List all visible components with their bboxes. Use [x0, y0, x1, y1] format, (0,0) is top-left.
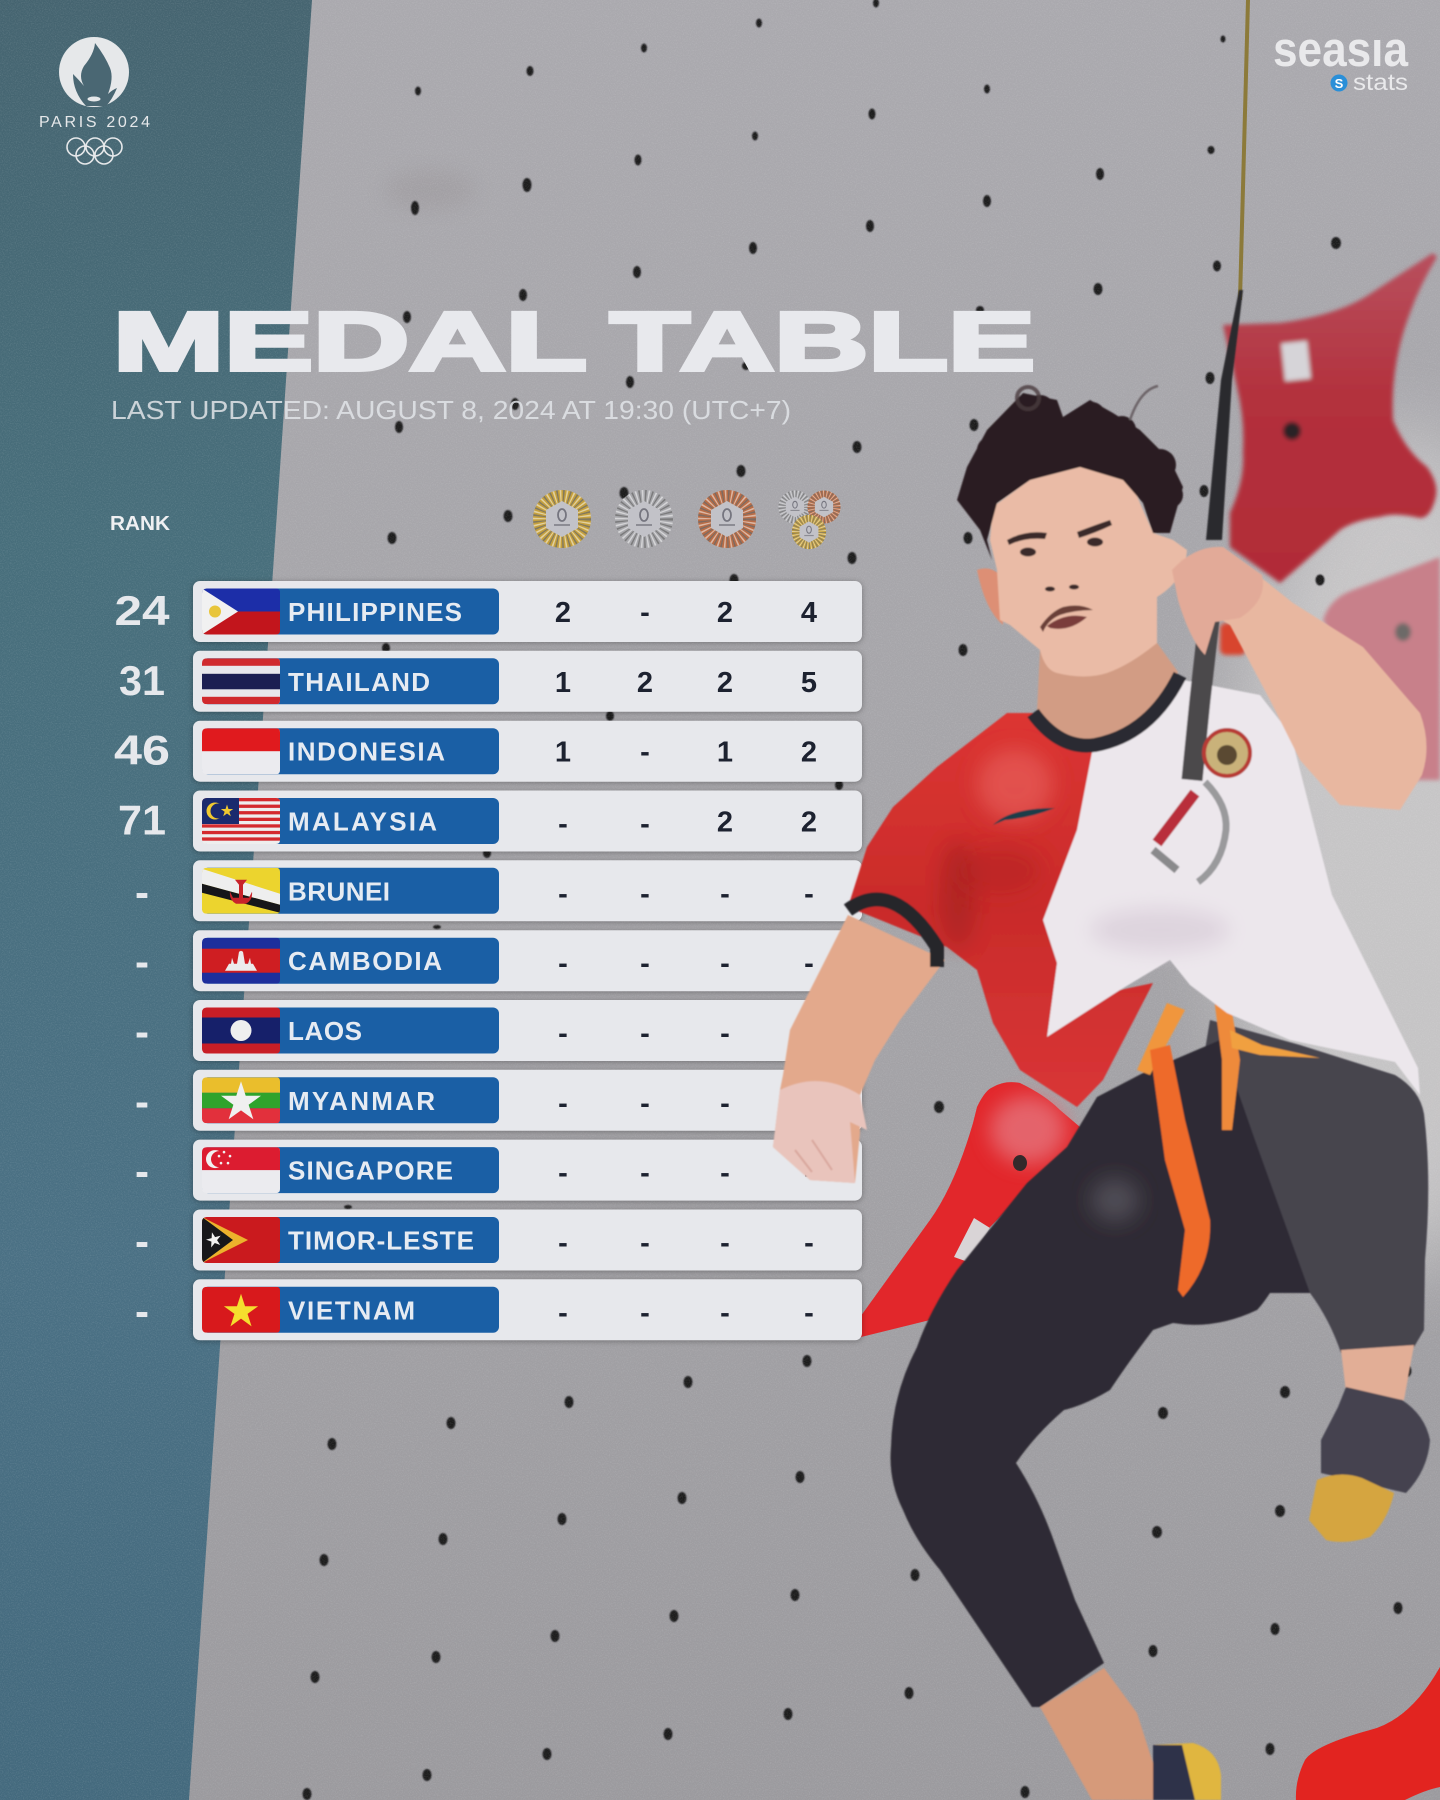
country name: BRUNEI — [288, 876, 390, 906]
table row: Philippines — [114, 581, 862, 642]
medal counts: 2 — [717, 597, 733, 629]
rank: - — [135, 1078, 149, 1125]
blue name bar — [202, 728, 499, 774]
row panel — [193, 1000, 862, 1061]
medal header: gold — [533, 490, 591, 548]
hair curl — [1017, 387, 1039, 409]
blue name bar — [202, 1287, 499, 1333]
table row: Laos — [135, 1000, 862, 1061]
medal counts — [555, 737, 817, 769]
medal counts: - — [640, 1018, 650, 1050]
rope: black section — [1206, 290, 1243, 540]
flag: Singapore — [202, 1147, 280, 1193]
flag: Malaysia — [202, 798, 280, 844]
back leg — [1180, 1020, 1428, 1356]
medal counts: 1 — [555, 667, 571, 699]
medal counts: - — [720, 1297, 730, 1329]
medal counts: 2 — [555, 597, 571, 629]
medal counts — [558, 948, 814, 980]
column header: rank: RANK — [110, 513, 171, 535]
collar — [1033, 675, 1180, 746]
climbing shoe: raised foot — [1309, 1387, 1430, 1542]
row panel — [193, 1279, 862, 1340]
sleeve logo — [993, 808, 1055, 825]
medal counts — [555, 667, 817, 699]
medal counts: 1 — [555, 737, 571, 769]
medal counts: - — [640, 597, 650, 629]
medal counts: - — [640, 1088, 650, 1120]
neck — [1037, 640, 1178, 742]
flag: Myanmar — [202, 1077, 280, 1123]
left hand — [773, 1081, 867, 1183]
medal counts — [558, 1297, 814, 1329]
medal counts: - — [558, 878, 568, 910]
rope: upper — [1240, 0, 1248, 300]
medal counts: 4 — [801, 597, 817, 629]
blue name bar — [202, 1147, 499, 1193]
medal counts: - — [720, 1228, 730, 1260]
chalk marks on thigh — [1091, 1178, 1139, 1222]
medal counts: - — [558, 1297, 568, 1329]
medal counts: - — [640, 1297, 650, 1329]
country name: PHILIPPINES — [288, 597, 462, 627]
title: MEDAL — [113, 295, 587, 388]
blue name bar — [202, 1217, 499, 1263]
front leg — [890, 1040, 1310, 1707]
medal counts: - — [640, 878, 650, 910]
teal left band — [0, 0, 312, 1800]
medal counts: - — [720, 1158, 730, 1190]
face — [990, 467, 1187, 676]
carabiner — [1153, 782, 1226, 882]
medal counts: - — [640, 1228, 650, 1260]
medal counts — [558, 1228, 814, 1260]
Paris 2024 logo — [39, 37, 150, 164]
medal header: silver — [615, 490, 673, 548]
facial features — [1007, 520, 1112, 632]
medal counts — [558, 1158, 814, 1190]
rank: - — [135, 1287, 149, 1334]
table row: Timor-Leste — [135, 1210, 862, 1270]
country name: MALAYSIA — [288, 806, 437, 836]
medal counts: 5 — [801, 667, 817, 699]
lower leg — [1040, 1668, 1169, 1800]
medal counts: - — [804, 1088, 814, 1120]
medal counts: - — [804, 948, 814, 980]
medal counts: - — [720, 948, 730, 980]
table row: Singapore — [135, 1140, 862, 1201]
title: TABLE — [610, 295, 1035, 388]
raised arm — [1180, 547, 1427, 810]
blue name bar — [202, 1077, 499, 1123]
sling strap — [1192, 620, 1209, 780]
rank: 31 — [119, 657, 165, 704]
medal counts: - — [804, 1018, 814, 1050]
row panel — [193, 930, 862, 991]
medal counts: - — [720, 1018, 730, 1050]
lower-arm left — [773, 915, 945, 1183]
subtitle: last updated: LAST UPDATED: AUGUST 8, 2024 AT 19:30 (UTC+7) — [111, 395, 791, 425]
shirt fold shading — [1090, 908, 1230, 952]
rank: 46 — [114, 727, 170, 774]
table row: Vietnam — [135, 1279, 862, 1340]
rank: - — [135, 1218, 149, 1264]
country name: TIMOR-LESTE — [288, 1226, 474, 1256]
flag: Indonesia — [202, 728, 280, 774]
flag: Thailand — [202, 658, 280, 704]
country name: LAOS — [288, 1016, 362, 1046]
sleeve cuff — [848, 899, 937, 967]
medal counts: - — [720, 878, 730, 910]
table row: Myanmar — [135, 1070, 862, 1131]
table row: Malaysia — [118, 790, 862, 852]
row panel — [193, 1210, 862, 1270]
table row: Indonesia — [114, 721, 862, 782]
medal counts: 2 — [717, 806, 733, 838]
shirt: white side — [1043, 680, 1420, 1095]
blue name bar — [202, 868, 499, 914]
medal counts: - — [558, 1158, 568, 1190]
medal counts: - — [804, 1297, 814, 1329]
country name: VIETNAM — [288, 1295, 415, 1325]
left ear — [977, 568, 1003, 625]
country name: CAMBODIA — [288, 946, 442, 976]
table row: Brunei — [135, 860, 862, 921]
medal counts: 2 — [801, 737, 817, 769]
flag: Laos — [202, 1008, 280, 1054]
row panel — [193, 1070, 862, 1131]
medal counts: - — [558, 1018, 568, 1050]
rank: - — [135, 1008, 149, 1055]
row panel — [193, 581, 862, 642]
medal counts: - — [804, 878, 814, 910]
seasia stats logo: stats — [1353, 69, 1408, 95]
country name: SINGAPORE — [288, 1156, 453, 1186]
flag: Philippines — [202, 588, 280, 634]
shirt: red side — [848, 713, 1153, 1107]
medal counts: 2 — [717, 667, 733, 699]
row panel — [193, 790, 862, 852]
blue name bar — [202, 588, 499, 634]
climbing hold: pale pink — [1323, 557, 1440, 780]
medal counts: - — [558, 948, 568, 980]
flag: Timor-Leste — [202, 1217, 280, 1263]
rank: - — [135, 1148, 149, 1195]
hair — [957, 393, 1183, 560]
shirt shading — [940, 749, 1053, 950]
medal counts: - — [720, 1088, 730, 1120]
seasia stats logo: S — [1335, 76, 1344, 91]
flag: Cambodia — [202, 938, 280, 984]
medal header: total — [778, 490, 841, 549]
table row: Thailand — [119, 651, 862, 712]
flag: Brunei — [202, 868, 280, 914]
medal counts: - — [558, 1088, 568, 1120]
blue name bar — [202, 938, 499, 984]
medal counts: - — [640, 808, 650, 840]
harness — [1137, 990, 1320, 1297]
flag: Vietnam — [202, 1287, 280, 1333]
medal counts: 2 — [637, 667, 653, 699]
hair wisp — [1130, 386, 1158, 420]
rank: 24 — [114, 587, 170, 634]
blue name bar — [202, 798, 499, 844]
medal counts — [558, 878, 814, 910]
rank: - — [135, 868, 149, 915]
medal counts: 1 — [717, 737, 733, 769]
medal counts — [555, 597, 817, 629]
climbing hold: upper red — [1220, 253, 1437, 655]
back skin: ankle — [1341, 1345, 1414, 1400]
medal counts: 2 — [801, 806, 817, 838]
medal counts: - — [640, 737, 650, 769]
climbing hold: bottom-right red — [1296, 1667, 1440, 1800]
medal counts — [558, 1018, 814, 1050]
climbing hold: lower red — [845, 1082, 1080, 1338]
blue name bar — [202, 658, 499, 704]
medal counts: - — [640, 1158, 650, 1190]
table row: Cambodia — [135, 930, 862, 991]
title — [113, 295, 1035, 388]
medal counts: - — [558, 1228, 568, 1260]
country name: INDONESIA — [288, 737, 445, 767]
row panel — [193, 721, 862, 782]
rank: - — [135, 938, 149, 985]
row panel — [193, 651, 862, 712]
athlete — [773, 290, 1430, 1800]
country name: THAILAND — [288, 667, 430, 697]
Paris 2024 logo: PARIS 2024 — [39, 114, 150, 131]
seasia stats logo: seasia — [1273, 23, 1409, 77]
medal counts: - — [804, 1158, 814, 1190]
climbing shoe: hanging foot — [1153, 1743, 1221, 1800]
medal header: bronze — [698, 490, 756, 548]
country name: MYANMAR — [288, 1086, 435, 1116]
rank: 71 — [118, 796, 166, 844]
medal counts — [558, 1088, 814, 1120]
medal counts — [558, 806, 817, 840]
row panel — [193, 1140, 862, 1201]
blue name bar — [202, 1008, 499, 1054]
medal counts: - — [640, 948, 650, 980]
shirt badge — [1204, 730, 1250, 776]
medal counts: - — [804, 1228, 814, 1260]
medal counts: - — [558, 808, 568, 840]
row panel — [193, 860, 862, 921]
seasia stats logo — [1274, 40, 1408, 92]
hand on rope — [1172, 547, 1263, 655]
